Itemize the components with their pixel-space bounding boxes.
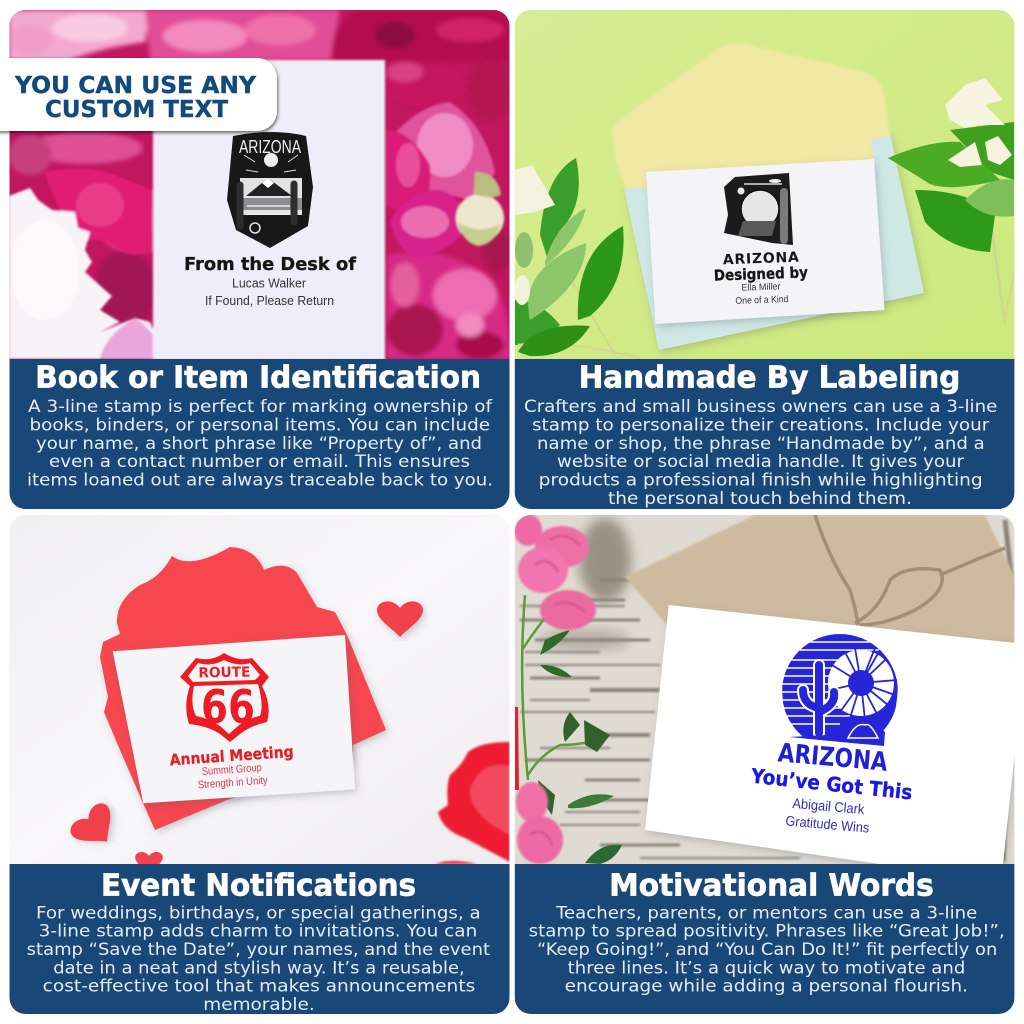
stamp text: annual meeting: Annual Meeting bbox=[169, 743, 294, 769]
body text: motivational words: encourage while adding a personal flourish. bbox=[565, 977, 968, 997]
kraft envelope bbox=[625, 515, 1014, 643]
body text: handmade by labeling: Crafters and small business owners can use a 3-line bbox=[524, 397, 997, 417]
body text: handmade by labeling bbox=[524, 397, 997, 509]
body text: book or item identification: your name, a short phrase like “Property of”, and bbox=[36, 434, 482, 454]
heading: motivational words: Motivational Words bbox=[609, 868, 934, 903]
text band: handmade by labeling bbox=[515, 359, 1014, 509]
photo: kraft parcel on white wood bbox=[514, 514, 1015, 865]
heading: event notifications: Event Notifications bbox=[101, 868, 416, 903]
body text: event notifications: 3-line stamp adds charm to invitations. You can bbox=[39, 922, 477, 942]
body text: event notifications: stamp “Save the Date”, your names, and the event bbox=[27, 940, 490, 960]
body text: handmade by labeling: website or social media handle. It gives your bbox=[557, 452, 964, 472]
panel: handmade by labeling bbox=[514, 10, 1015, 509]
body text: motivational words: three lines. It’s a quick way to motivate and bbox=[568, 958, 965, 978]
text band: book or item identification bbox=[10, 359, 510, 509]
logo word: route: ROUTE bbox=[198, 665, 251, 681]
icon: heart bottom center bbox=[135, 852, 163, 864]
body text: handmade by labeling: products a professional finish while highlighting bbox=[539, 470, 983, 490]
icon: heart bottom left bbox=[70, 802, 117, 846]
stamp logo: arizona shield bbox=[227, 132, 313, 248]
heading: book or item identification: Book or Item Identification bbox=[35, 360, 481, 396]
photo: envelope on green background bbox=[514, 10, 1015, 360]
body text: event notifications: For weddings, birthdays, or special gatherings, a bbox=[36, 903, 481, 923]
note card bbox=[645, 605, 1015, 864]
stamp text: abigail clark: Abigail Clark bbox=[792, 795, 866, 817]
body text: event notifications: date in a neat and stylish way. It’s a reusable, bbox=[53, 958, 465, 978]
body text: motivational words: “Keep Going!”, and “You Can Do It!” fit perfectly on bbox=[537, 940, 997, 960]
panel: event notifications bbox=[9, 515, 510, 1015]
stamp text: you've got this: You’ve Got This bbox=[749, 764, 914, 804]
logo word: arizona: ARIZONA bbox=[239, 137, 301, 157]
body text: motivational words: Teachers, parents, or mentors can use a 3-line bbox=[555, 903, 977, 923]
twine bbox=[815, 515, 1005, 625]
stamp text: one of a kind: One of a Kind bbox=[735, 294, 789, 307]
body text: book or item identification: books, binders, or personal items. You can include bbox=[30, 416, 490, 436]
body text: book or item identification: items loaned out are always traceable back to you. bbox=[27, 470, 493, 490]
card bbox=[113, 635, 355, 803]
envelope: blue bbox=[624, 133, 924, 350]
greenery: right sprig bbox=[888, 78, 1014, 325]
panel: motivational words bbox=[514, 514, 1015, 1014]
text band: motivational words bbox=[515, 864, 1014, 1014]
icon: heart top right bbox=[377, 601, 423, 637]
stamp text: arizona: ARIZONA bbox=[777, 738, 889, 778]
heading: handmade by labeling: Handmade By Labeling bbox=[579, 360, 960, 396]
greenery: left sprig bbox=[514, 158, 640, 358]
stamp text: ella miller: Ella Miller bbox=[741, 281, 781, 294]
photo: red envelope and hearts bbox=[9, 515, 510, 873]
body text: handmade by labeling: the personal touch behind them. bbox=[608, 489, 912, 509]
body text: book or item identification bbox=[27, 397, 493, 490]
photo: card on pink peonies bbox=[8, 10, 512, 360]
stamp logo: arizona state bbox=[724, 173, 793, 245]
body text: event notifications: memorable. bbox=[203, 995, 315, 1015]
body text: event notifications: cost-effective tool that makes announcements bbox=[43, 977, 475, 997]
stamp text: arizona: ARIZONA bbox=[723, 250, 799, 268]
body text: event notifications bbox=[27, 903, 490, 1015]
stamp text: summit group: Summit Group bbox=[201, 762, 262, 778]
stamp text: lucas walker: Lucas Walker bbox=[232, 276, 307, 290]
body text: motivational words: stamp to spread positivity. Phrases like “Great Job!”, bbox=[529, 922, 1005, 942]
body text: book or item identification: A 3-line stamp is perfect for marking ownership of bbox=[28, 397, 493, 417]
stamp logo: arizona cactus and sun bbox=[782, 634, 898, 750]
stamp logo: route 66 shield bbox=[180, 653, 269, 742]
stamp text: if found: If Found, Please Return bbox=[205, 293, 334, 308]
body text: book or item identification: even a contact number or email. This ensures bbox=[49, 452, 470, 472]
envelope flap: yellow bbox=[612, 43, 890, 188]
flower: red tulip bbox=[435, 742, 510, 864]
body text: motivational words bbox=[529, 903, 1005, 997]
envelope: red bbox=[100, 547, 386, 830]
stamp text: designed by: Designed by bbox=[714, 263, 808, 285]
callout badge: you can use any custom text: CUSTOM TEXT bbox=[45, 95, 228, 123]
text band: event notifications bbox=[10, 864, 510, 1015]
body text: handmade by labeling: stamp to personalize their creations. Include your bbox=[532, 416, 989, 436]
callout badge: you can use any custom text bbox=[0, 58, 277, 131]
stamp text: gratitude wins: Gratitude Wins bbox=[785, 812, 870, 836]
callout badge: you can use any custom text: YOU CAN USE ANY bbox=[14, 71, 257, 99]
panel: book or item identification bbox=[0, 10, 512, 509]
note card bbox=[646, 159, 884, 324]
stamp text: strength in unity: Strength in Unity bbox=[197, 775, 269, 791]
logo number: 66: 66 bbox=[201, 680, 255, 734]
stamp text: from the desk of: From the Desk of bbox=[184, 254, 356, 275]
flowers: pink roses and stems bbox=[514, 514, 622, 864]
body text: handmade by labeling: name or shop, the phrase “Handmade by”, and a bbox=[537, 434, 985, 454]
wood grain bbox=[520, 520, 1014, 862]
